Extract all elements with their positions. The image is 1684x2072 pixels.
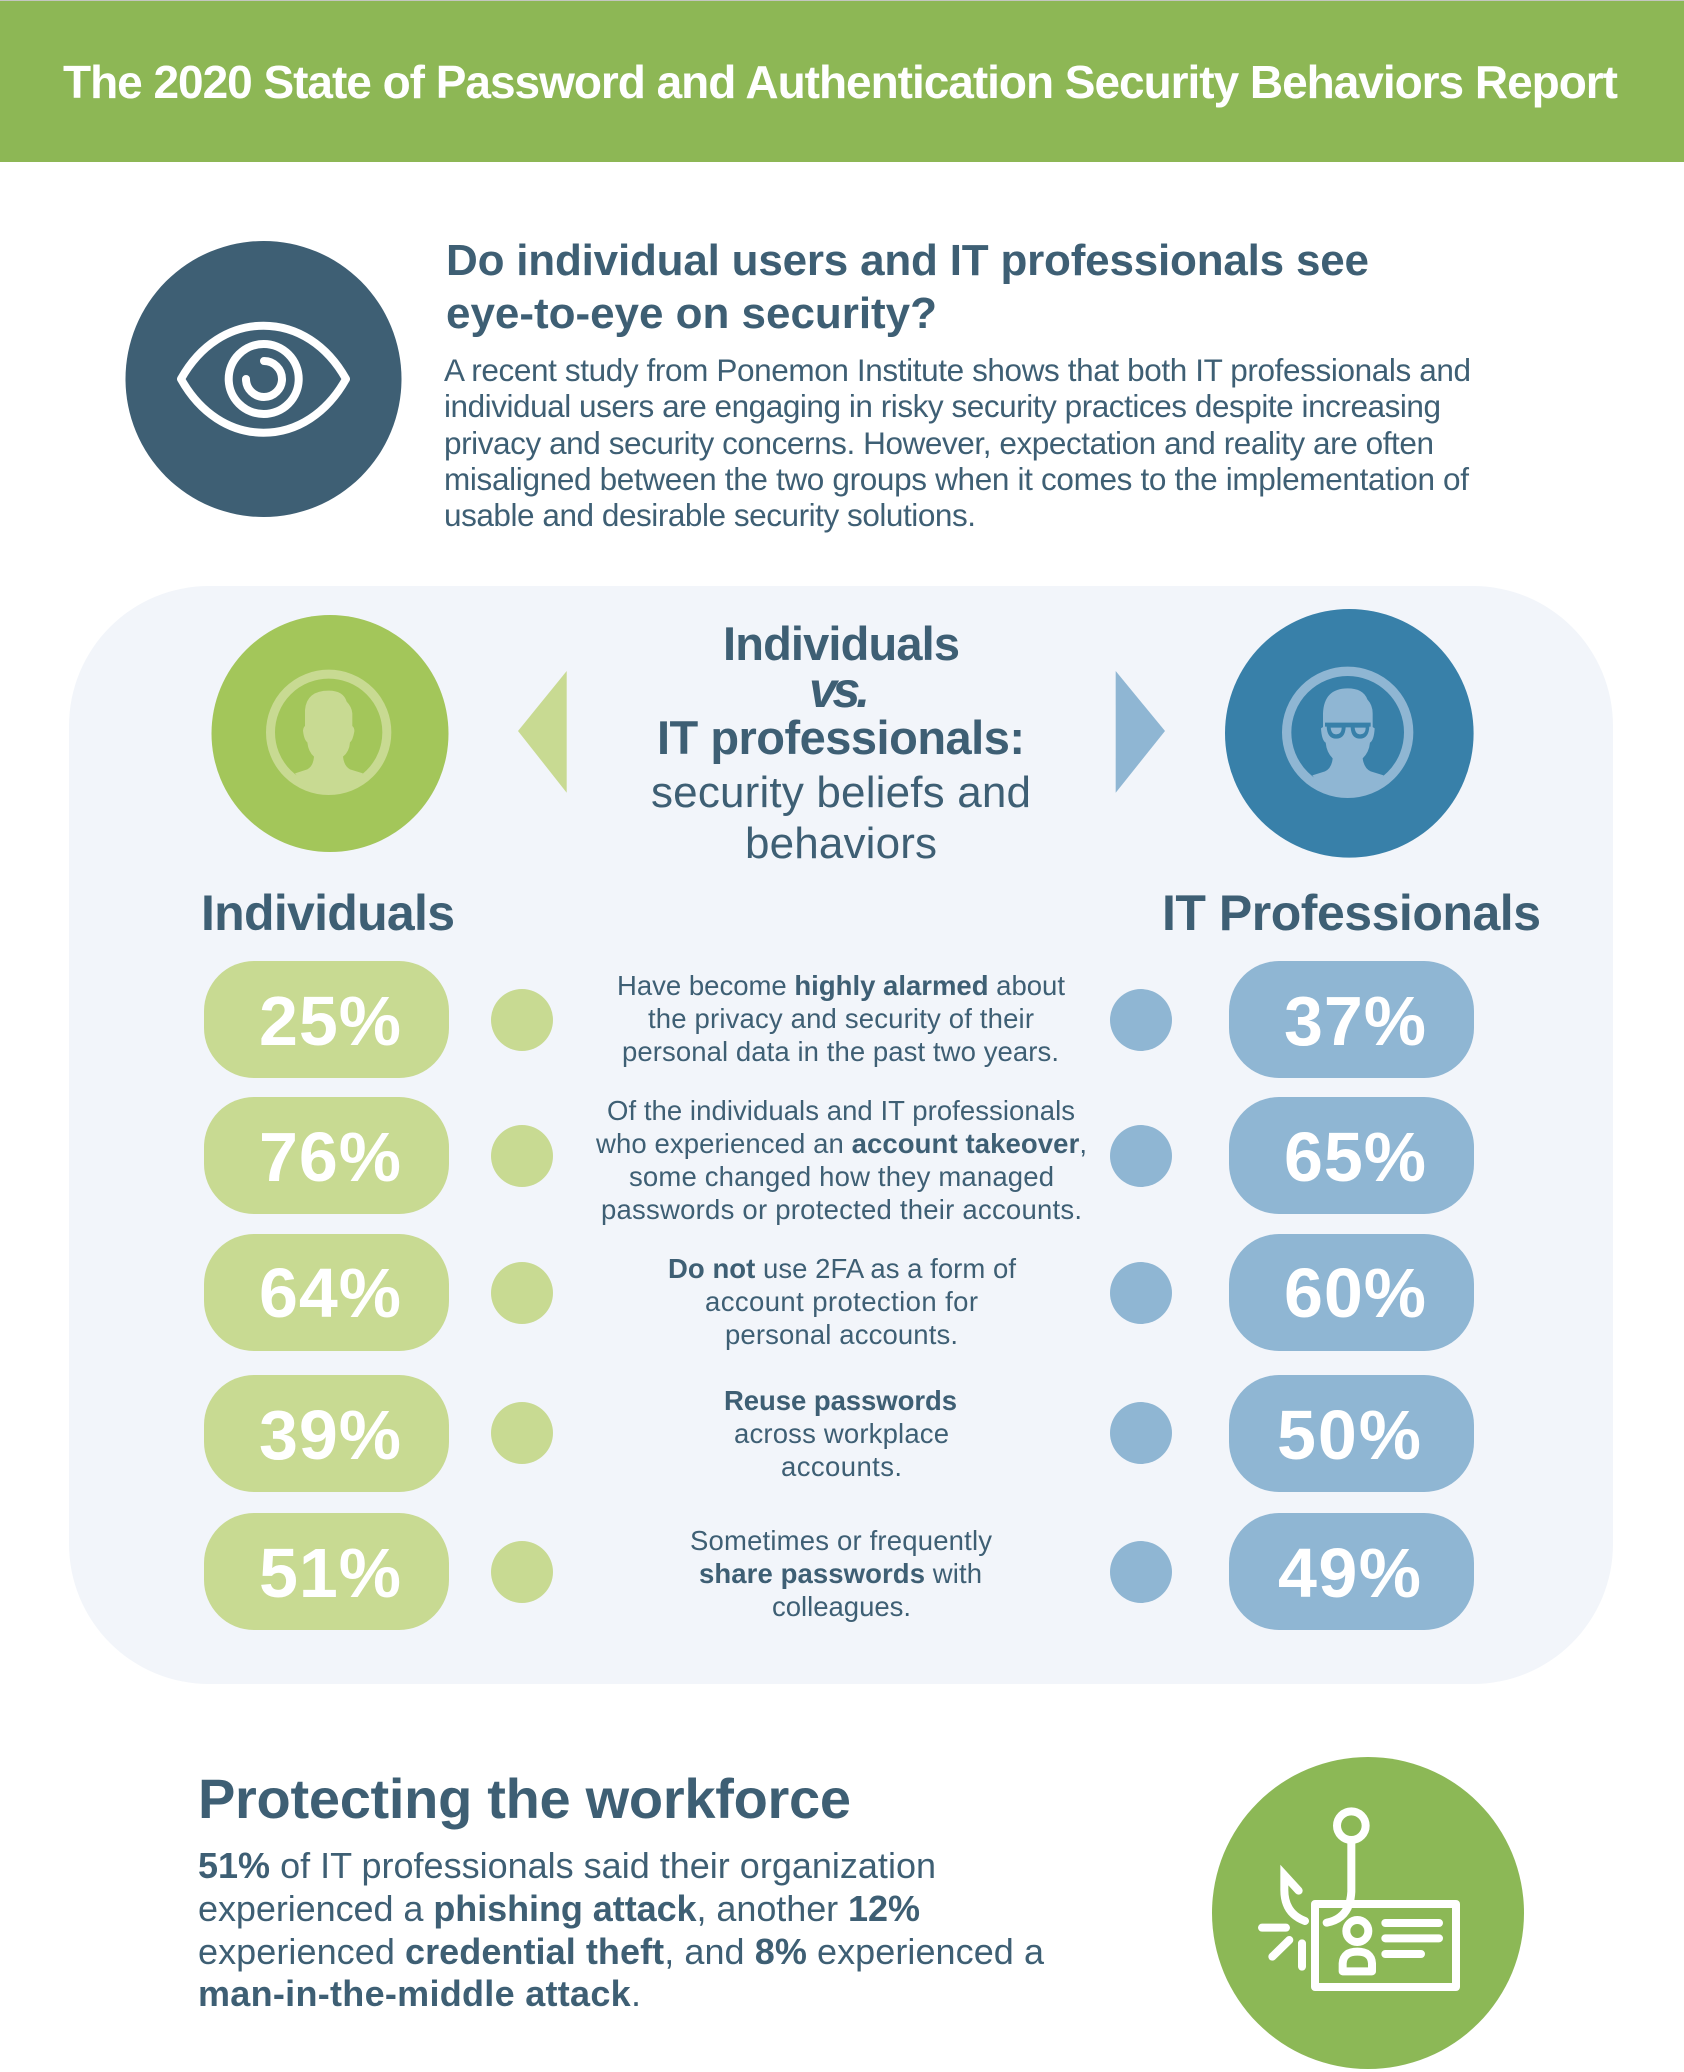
text block: protecting the workforce: man-in-the-middle attack. — [198, 1973, 641, 2014]
comparison heading: IT professionals: — [657, 711, 1025, 764]
icon: individual user — [212, 615, 448, 852]
intro text block: individual users are engaging in risky security practices despite increasing — [444, 388, 1441, 424]
row 3: do not use 2FA: account protection for — [705, 1286, 978, 1317]
row 2: account takeover: Of the individuals and IT professionals — [607, 1095, 1075, 1126]
intro text block: usable and desirable security solutions. — [444, 497, 976, 533]
comparison heading: Individuals — [723, 617, 960, 670]
text block: protecting the workforce: experienced credential theft, and 8% experienced a — [198, 1931, 1045, 1972]
comparison heading: security beliefs and — [651, 768, 1031, 817]
title: The 2020 State of Password and Authentication Security Behaviors Report — [63, 56, 1618, 108]
row 2: account takeover — [204, 1095, 1474, 1225]
intro heading — [446, 236, 1369, 338]
row 5: share passwords — [204, 1513, 1474, 1630]
panel background — [69, 586, 1613, 1684]
row 3: do not use 2FA: 64% — [259, 1254, 401, 1332]
row 2: account takeover: 76% — [259, 1118, 401, 1196]
row 5: share passwords: 51% — [259, 1534, 401, 1612]
row 3: do not use 2FA: 60% — [1284, 1254, 1426, 1332]
panel: individuals vs IT professionals — [69, 586, 1613, 1684]
row 1: highly alarmed: 25% — [259, 982, 401, 1060]
text block: protecting the workforce: experienced a phishing attack, another 12% — [198, 1888, 920, 1929]
row 2: account takeover: 65% — [1284, 1118, 1426, 1196]
comparison heading: vs. — [809, 662, 870, 718]
text block: protecting the workforce — [198, 1845, 1045, 2014]
row 4: reuse passwords — [204, 1375, 1474, 1492]
row 4: reuse passwords: 39% — [259, 1396, 401, 1474]
icon: eye — [126, 241, 402, 517]
row 1: highly alarmed: personal data in the past two years. — [622, 1036, 1059, 1067]
intro heading: eye-to-eye on security? — [446, 289, 937, 338]
row 1: highly alarmed: Have become highly alarmed about — [617, 970, 1065, 1001]
column heading: IT professionals: IT Professionals — [1162, 885, 1541, 941]
row 3: do not use 2FA — [204, 1234, 1474, 1351]
arrow: left — [518, 671, 567, 793]
row 4: reuse passwords: Reuse passwords — [724, 1385, 957, 1416]
row 2: account takeover: passwords or protected their accounts. — [601, 1194, 1082, 1225]
header banner — [0, 0, 1684, 162]
row 4: reuse passwords: across workplace — [734, 1418, 949, 1449]
heading: protecting the workforce: Protecting the workforce — [198, 1767, 851, 1830]
row 5: share passwords: share passwords with — [699, 1558, 982, 1589]
intro text block: privacy and security concerns. However, expectation and reality are often — [444, 425, 1434, 461]
row 3: do not use 2FA: Do not use 2FA as a form of — [668, 1253, 1016, 1284]
row 2: account takeover: some changed how they managed — [629, 1161, 1054, 1192]
intro text block — [444, 352, 1471, 533]
row 1: highly alarmed — [204, 961, 1474, 1078]
row 1: highly alarmed: 37% — [1284, 982, 1426, 1060]
text block: protecting the workforce: 51% of IT professionals said their organization — [198, 1845, 936, 1886]
arrow: right — [1116, 671, 1165, 793]
row 2: account takeover: who experienced an account takeover, — [595, 1128, 1087, 1159]
row 1: highly alarmed: the privacy and security of their — [648, 1003, 1034, 1034]
column heading: individuals: Individuals — [201, 885, 455, 941]
icon: phishing hook and ID card — [1212, 1757, 1524, 2069]
row 5: share passwords: Sometimes or frequently — [690, 1525, 992, 1556]
intro text block: misaligned between the two groups when it comes to the implementation of — [444, 461, 1469, 497]
row 4: reuse passwords: 50% — [1277, 1396, 1421, 1474]
intro text block: A recent study from Ponemon Institute shows that both IT professionals and — [444, 352, 1471, 388]
row 4: reuse passwords: accounts. — [781, 1451, 902, 1482]
icon: IT professional — [1225, 609, 1474, 858]
row 5: share passwords: colleagues. — [772, 1591, 911, 1622]
row 5: share passwords: 49% — [1278, 1534, 1421, 1612]
comparison heading: behaviors — [745, 819, 937, 868]
intro heading: Do individual users and IT professionals see — [446, 236, 1369, 285]
row 3: do not use 2FA: personal accounts. — [725, 1319, 958, 1350]
comparison heading — [651, 617, 1031, 868]
